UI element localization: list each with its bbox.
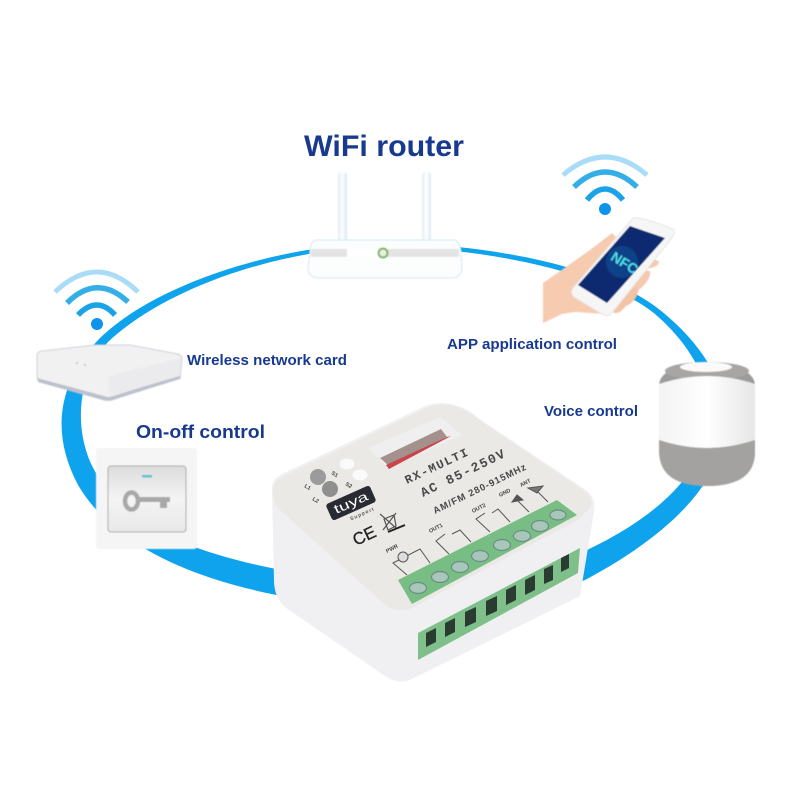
- icon: smart speaker: [659, 362, 755, 486]
- green terminal block: [398, 500, 577, 604]
- small terminal labels: OUT2: [471, 503, 487, 515]
- wiring diagrams: [393, 486, 548, 575]
- small terminal labels: [385, 478, 533, 555]
- indicator lights and buttons: S1: [330, 471, 339, 479]
- product text: AM/FM 280-915MHz: [431, 462, 528, 517]
- CE and recycling marks: [350, 513, 405, 550]
- label: Voice control: Voice control: [544, 404, 638, 420]
- tuya badge: [325, 485, 380, 529]
- icon: wireless network card: [37, 345, 182, 400]
- tuya badge: tuya: [331, 488, 371, 517]
- small terminal labels: OUT1: [428, 523, 444, 535]
- icon: phone in hand with NFC: NFC: [608, 248, 641, 277]
- title: WiFi router: WiFi router: [304, 130, 464, 163]
- indicator lights and buttons: L2: [311, 497, 320, 505]
- display window: [368, 417, 462, 469]
- module top face: [273, 405, 591, 610]
- icon: router: [308, 172, 462, 278]
- product text: [403, 446, 528, 517]
- indicator lights and buttons: L1: [303, 484, 312, 492]
- product text: RX-MULTI: [403, 446, 470, 488]
- icon: phone in hand with NFC: [543, 218, 674, 323]
- small terminal labels: ANT: [519, 478, 533, 489]
- small terminal labels: PWR: [385, 544, 399, 555]
- green terminal front: [418, 548, 580, 660]
- indicator lights and buttons: S2: [344, 482, 353, 490]
- relay module: [272, 403, 594, 682]
- connection ring: [62, 243, 726, 608]
- CE and recycling marks: CE: [350, 522, 379, 550]
- label: On-off control: On-off control: [136, 422, 265, 442]
- tuya badge: Support: [349, 506, 376, 522]
- product text: AC 85-250V: [418, 447, 508, 501]
- label: APP application control: APP application control: [447, 337, 617, 353]
- label: Wireless network card: Wireless network card: [187, 353, 347, 369]
- module housing: [272, 403, 594, 682]
- indicator lights and buttons: [303, 458, 368, 505]
- small terminal labels: GND: [498, 488, 512, 499]
- icon: wifi above network card: [55, 272, 138, 330]
- icon: key switch: [96, 448, 197, 549]
- icon: wifi above phone: [563, 157, 647, 215]
